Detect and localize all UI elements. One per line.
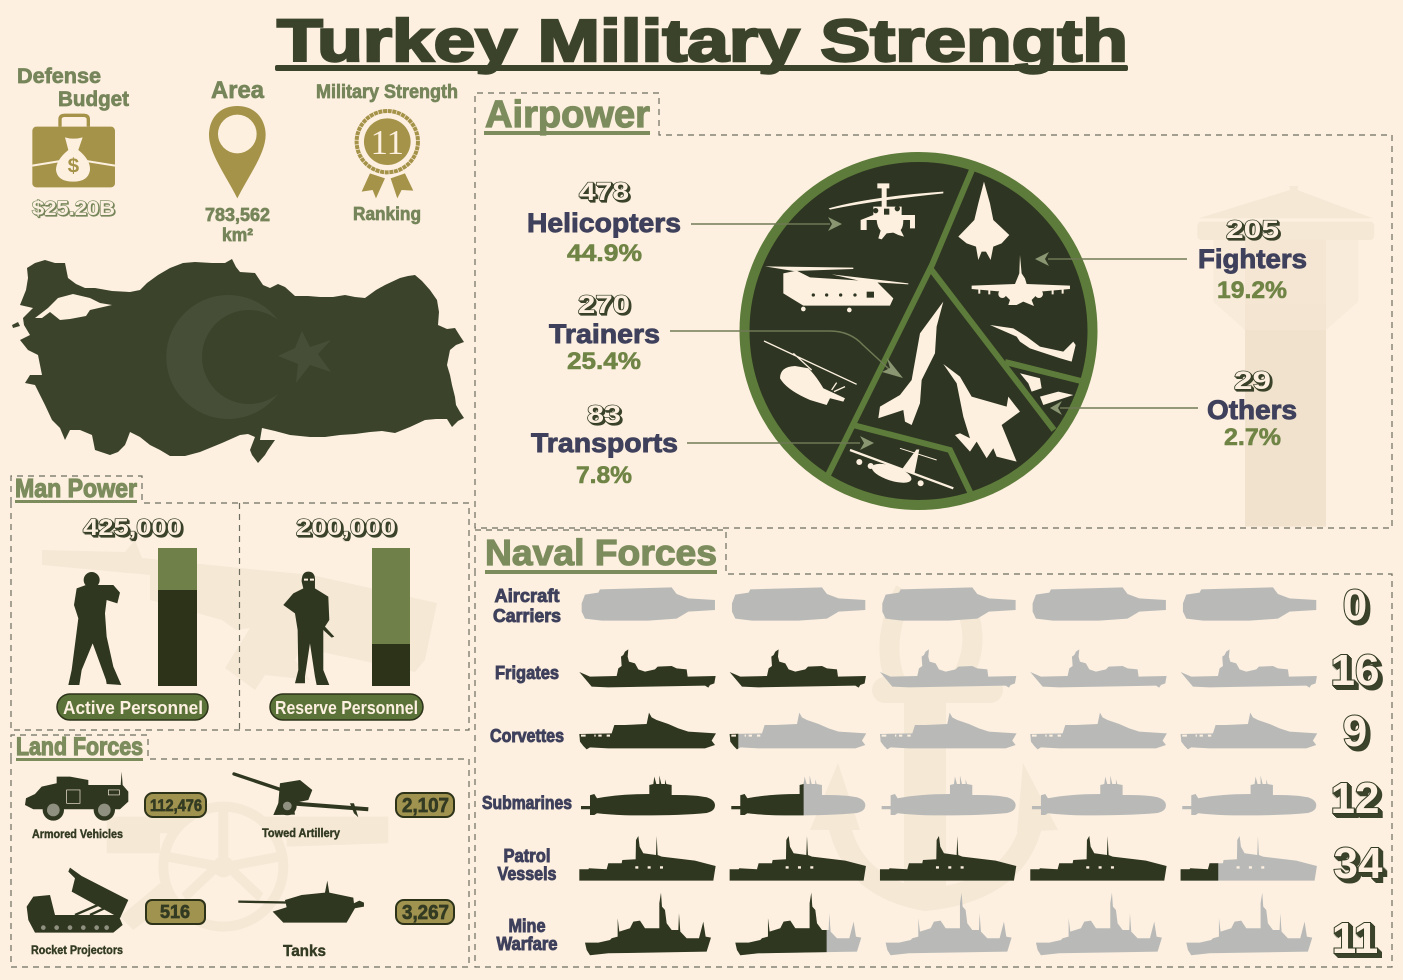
panel: defense budget: Defense	[17, 65, 101, 88]
icon: rocket launcher	[27, 868, 128, 933]
label: helicopters: Helicopters	[527, 208, 681, 238]
icons: mine warfare row	[585, 893, 1312, 955]
count pill	[146, 900, 205, 924]
icons: submarine row	[581, 775, 1316, 815]
label: trainers: Trainers	[549, 319, 660, 349]
row: aircraft carriers: Carriers	[493, 606, 561, 626]
row: mine warfare: Mine	[508, 916, 546, 936]
pill: reserve personnel: Reserve Personnel	[275, 698, 418, 718]
count pill: 112,476	[150, 796, 202, 815]
rocket projectors: Rocket Projectors	[31, 945, 123, 957]
icon: howitzer	[234, 774, 368, 817]
label: others	[1207, 367, 1297, 451]
count pill: 3,267	[402, 902, 449, 924]
panel: military strength ranking	[316, 82, 458, 224]
icon: ranking medal: 11	[371, 124, 404, 162]
row: submarines: Submarines	[482, 793, 572, 813]
row: aircraft carriers: 0	[1343, 581, 1367, 630]
icon: ranking medal	[357, 111, 418, 198]
label: others: Others	[1207, 395, 1297, 425]
label: fighters: Fighters	[1198, 244, 1307, 274]
aircraft silhouettes	[764, 182, 1076, 488]
row: frigates	[495, 646, 1379, 695]
pill: active personnel: Active Personnel	[63, 698, 203, 718]
panel: man power	[11, 473, 469, 730]
icon: briefcase with money bag: $	[68, 155, 80, 178]
icon: briefcase with money bag	[32, 115, 115, 187]
count pill: 2,107	[402, 795, 449, 817]
label: trainers: 270	[578, 291, 630, 319]
crescent and star emblem	[166, 295, 331, 419]
row: frigates: Frigates	[495, 663, 559, 683]
row: aircraft carriers: Aircraft	[494, 586, 560, 606]
map of Turkey	[12, 259, 464, 463]
heading: man power: Man Power	[15, 473, 137, 503]
row: frigates: 16	[1331, 646, 1379, 695]
panel: area: Area	[211, 77, 265, 104]
row: patrol vessels: Patrol	[504, 846, 550, 866]
row: corvettes: 9	[1343, 707, 1367, 756]
count pill: 516	[160, 902, 190, 922]
panel: military strength ranking: Ranking	[353, 204, 421, 224]
label: fighters: 19.2%	[1217, 277, 1287, 304]
tanks	[238, 881, 454, 960]
rocket projectors	[27, 868, 205, 957]
icons: frigate row	[579, 649, 1317, 688]
watermark: watchtower	[1197, 186, 1374, 527]
panel: military strength ranking: Military Strength	[316, 82, 458, 103]
row: corvettes	[490, 712, 1371, 752]
label: transports: Transports	[531, 428, 678, 458]
heading: naval forces: Naval Forces	[485, 532, 717, 573]
row: corvettes: Corvettes	[490, 726, 564, 746]
icons: patrol row	[579, 836, 1317, 881]
icon: armored vehicle	[25, 772, 128, 821]
icon: soldier aiming	[68, 572, 121, 685]
heading: airpower: Airpower	[485, 94, 650, 136]
active personnel: 425,000	[83, 514, 182, 540]
row: patrol vessels: Vessels	[498, 864, 556, 884]
armored vehicles: Armored Vehicles	[32, 829, 123, 841]
icon: soldier standing	[283, 572, 334, 685]
pill: reserve personnel	[270, 694, 423, 720]
label: helicopters: 478	[579, 178, 629, 206]
icons: corvette row	[579, 713, 1317, 749]
row: submarines: 12	[1331, 774, 1379, 823]
arrows: category leader lines	[670, 217, 1198, 450]
bar: reserve share	[372, 548, 410, 686]
label: transports: 83	[587, 401, 621, 429]
row: patrol vessels: 34	[1334, 839, 1383, 888]
label: others: 29	[1234, 367, 1271, 395]
active personnel	[57, 514, 208, 720]
panel: land forces	[11, 733, 469, 967]
row: aircraft carriers	[493, 581, 1367, 630]
icons: carrier row	[582, 587, 1316, 621]
row: submarines	[482, 776, 1383, 818]
pie chart of aircraft types	[744, 157, 1092, 505]
bar: active share	[158, 548, 197, 686]
label: transports	[531, 401, 678, 489]
reserve personnel: 200,000	[296, 514, 396, 540]
watermark: cannon	[107, 807, 388, 930]
row: mine warfare	[496, 893, 1378, 963]
panel: defense budget	[17, 65, 129, 220]
label: trainers: 25.4%	[567, 348, 641, 375]
icon: tank	[238, 881, 364, 923]
reserve personnel	[270, 514, 423, 720]
watermark: rifle	[42, 540, 437, 690]
count pill	[145, 793, 206, 817]
panel: defense budget: $25.20B	[32, 198, 115, 220]
label: helicopters: 44.9%	[567, 240, 642, 267]
label: helicopters	[527, 178, 681, 267]
panel: defense budget: Budget	[58, 88, 129, 111]
label: others: 2.7%	[1224, 424, 1281, 451]
tanks: Tanks	[283, 943, 326, 960]
panel: area: 783,562	[205, 205, 270, 225]
panel: naval forces	[475, 530, 1392, 967]
label: fighters	[1198, 216, 1307, 304]
row: mine warfare: 11	[1332, 914, 1378, 963]
panel: area	[205, 77, 270, 245]
towed artillery	[234, 774, 454, 840]
heading: land forces: Land Forces	[16, 733, 143, 761]
label: fighters: 205	[1226, 216, 1279, 244]
watermark: anchor	[836, 590, 1035, 900]
panel: area: km²	[222, 225, 253, 245]
label: trainers	[549, 291, 660, 375]
title: Turkey Military Strength	[277, 8, 1128, 74]
armored vehicles	[25, 772, 206, 841]
icon: location pin	[209, 106, 266, 198]
panel: airpower	[475, 93, 1392, 528]
row: mine warfare: Warfare	[496, 934, 558, 954]
label: transports: 7.8%	[576, 462, 632, 489]
towed artillery: Towed Artillery	[262, 828, 341, 840]
row: patrol vessels	[498, 836, 1383, 888]
